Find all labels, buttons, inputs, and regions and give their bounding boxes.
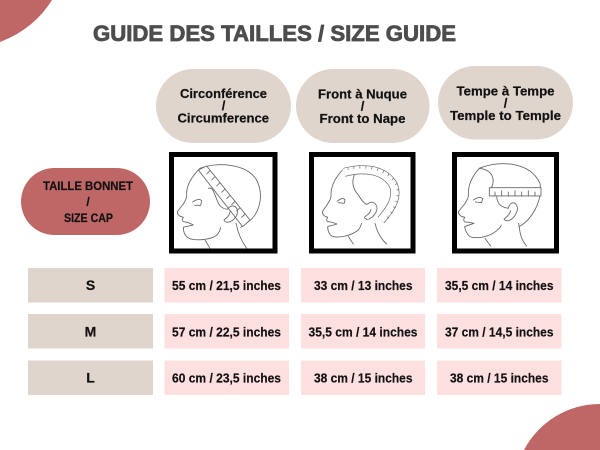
column header: temple to temple: Tempe à Tempe [456,84,554,98]
row M: 35,5 cm / 14 inches [308,324,418,340]
row M: 37 cm / 14,5 inches [445,324,554,340]
column header: front to nape [296,69,430,143]
decorative corner: bottom right [524,404,600,450]
title: GUIDE DES TAILLES / SIZE GUIDE [93,21,456,46]
row M [28,314,562,348]
row S: 55 cm / 21,5 inches [172,278,281,293]
column header: temple to temple: Temple to Temple [450,108,561,123]
row header: size cap: / [86,195,90,209]
row L: L [86,370,95,386]
column header: front to nape: Front to Nape [320,111,406,126]
row M: 57 cm / 22,5 inches [172,324,281,340]
column header: circumference: Circumference [178,110,269,126]
column header: front to nape: / [361,98,365,114]
row L: 60 cm / 23,5 inches [172,370,281,386]
row L: 38 cm / 15 inches [450,370,548,386]
row header: size cap: TAILLE BONNET [43,179,134,193]
row S [28,268,562,302]
column header: temple to temple: / [504,96,508,110]
column header: circumference: / [222,98,226,113]
row L: 38 cm / 15 inches [314,370,412,386]
column header: circumference [156,69,291,143]
column header: circumference: Circonférence [180,86,267,101]
column header: temple to temple [438,66,573,140]
row S: S [86,277,95,293]
column header: front to nape: Front à Nuque [318,86,407,102]
row L [28,360,562,395]
row header: size cap: SIZE CAP [64,211,113,225]
row M: M [85,324,96,340]
illustration: head with temple to temple band [454,154,556,251]
illustration: head with circumference band [172,154,275,251]
row S: 35,5 cm / 14 inches [445,278,554,293]
illustration: head with front to nape band [312,154,413,251]
decorative corner: top left [0,0,52,42]
row header: size cap [21,168,150,235]
row S: 33 cm / 13 inches [314,278,412,293]
